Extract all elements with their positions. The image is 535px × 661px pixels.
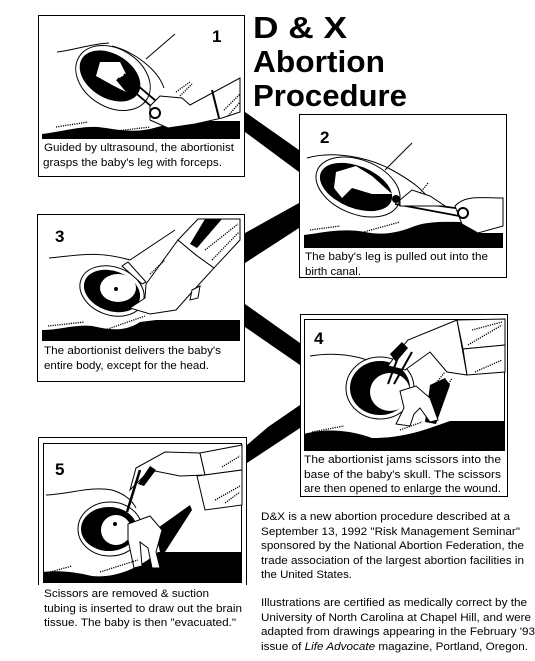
panel 5 number: 5 (55, 460, 64, 479)
panel 2 number: 2 (320, 128, 329, 147)
text block: about the procedure: sponsored by the National Abortion Federation, the (261, 540, 524, 552)
panel 5 frame (38, 438, 246, 585)
panel 4 caption: base of the baby's skull. The scissors (304, 469, 502, 481)
panel 4 illustration (304, 319, 505, 451)
text block: illustration source: Illustrations are certified as medically correct by the (261, 597, 527, 609)
text block: about the procedure: trade association of the largest abortion facilities in (261, 555, 524, 567)
panel 1 number: 1 (212, 27, 221, 46)
panel 4 caption: The abortionist jams scissors into the (304, 454, 501, 466)
text block: about the procedure: D&X is a new abortion procedure described at a (261, 511, 511, 523)
panel 5 (38, 438, 246, 629)
panel 3 number: 3 (55, 227, 64, 246)
text block: illustration source: issue of Life Advocate magazine, Portland, Oregon. (261, 641, 528, 653)
panel 3 (38, 214, 244, 382)
panel 5 caption: tissue. The baby is then "evacuated." (44, 617, 236, 629)
text block: illustration source: University of North Carolina at Chapel Hill, and were (261, 612, 531, 624)
panel 2 (300, 114, 506, 278)
panel 3 caption (44, 345, 222, 372)
panel 1 caption: Guided by ultrasound, the abortionist (44, 142, 234, 154)
panel 4 frame (300, 314, 508, 496)
panel 5 caption: Scissors are removed & suction (44, 588, 209, 600)
panel 2 caption: birth canal. (305, 266, 361, 278)
text block: illustration source: adapted from drawings appearing in the February '93 (261, 626, 535, 638)
panel 3 caption: The abortionist delivers the baby's (44, 345, 222, 357)
text block: about the procedure: September 13, 1992 "Risk Management Seminar" (261, 526, 520, 538)
title: Abortion (253, 44, 385, 79)
panel 1 caption: grasps the baby's leg with forceps. (43, 157, 222, 169)
panel 5 illustration (43, 444, 242, 583)
panel 3 illustration (42, 219, 240, 341)
panel 2 caption (305, 251, 488, 278)
panel 3 frame (38, 214, 244, 382)
panel 2 frame (300, 114, 506, 278)
panel 4 caption (304, 454, 502, 495)
panel 1 caption (43, 142, 234, 169)
panel 2 caption: The baby's leg is pulled out into the (305, 251, 488, 263)
text block: illustration source (261, 597, 535, 653)
text block: about the procedure (261, 511, 524, 581)
connector: panel 4 to panel 5 (247, 405, 300, 463)
panel 1 illustration (42, 32, 240, 139)
panel 4 caption: are then opened to enlarge the wound. (304, 483, 501, 495)
connector: panel 3 to panel 4 (245, 304, 300, 365)
panel 2 illustration (304, 143, 503, 248)
panel 5 caption: tubing is inserted to draw out the brain (44, 603, 242, 615)
connector: panel 2 to panel 3 (245, 203, 299, 263)
panel 1 (38, 16, 244, 176)
panel 5 caption (44, 588, 242, 629)
title: Procedure (253, 78, 407, 113)
connector: panel 1 to panel 2 (245, 112, 299, 172)
panel 4 number: 4 (314, 329, 324, 348)
panel 1 frame (38, 16, 244, 176)
text block: about the procedure: the United States. (261, 569, 352, 581)
title: D & X (253, 10, 347, 45)
title (253, 10, 407, 113)
panel 3 caption: entire body, except for the head. (44, 360, 209, 372)
panel 4 (300, 314, 508, 496)
